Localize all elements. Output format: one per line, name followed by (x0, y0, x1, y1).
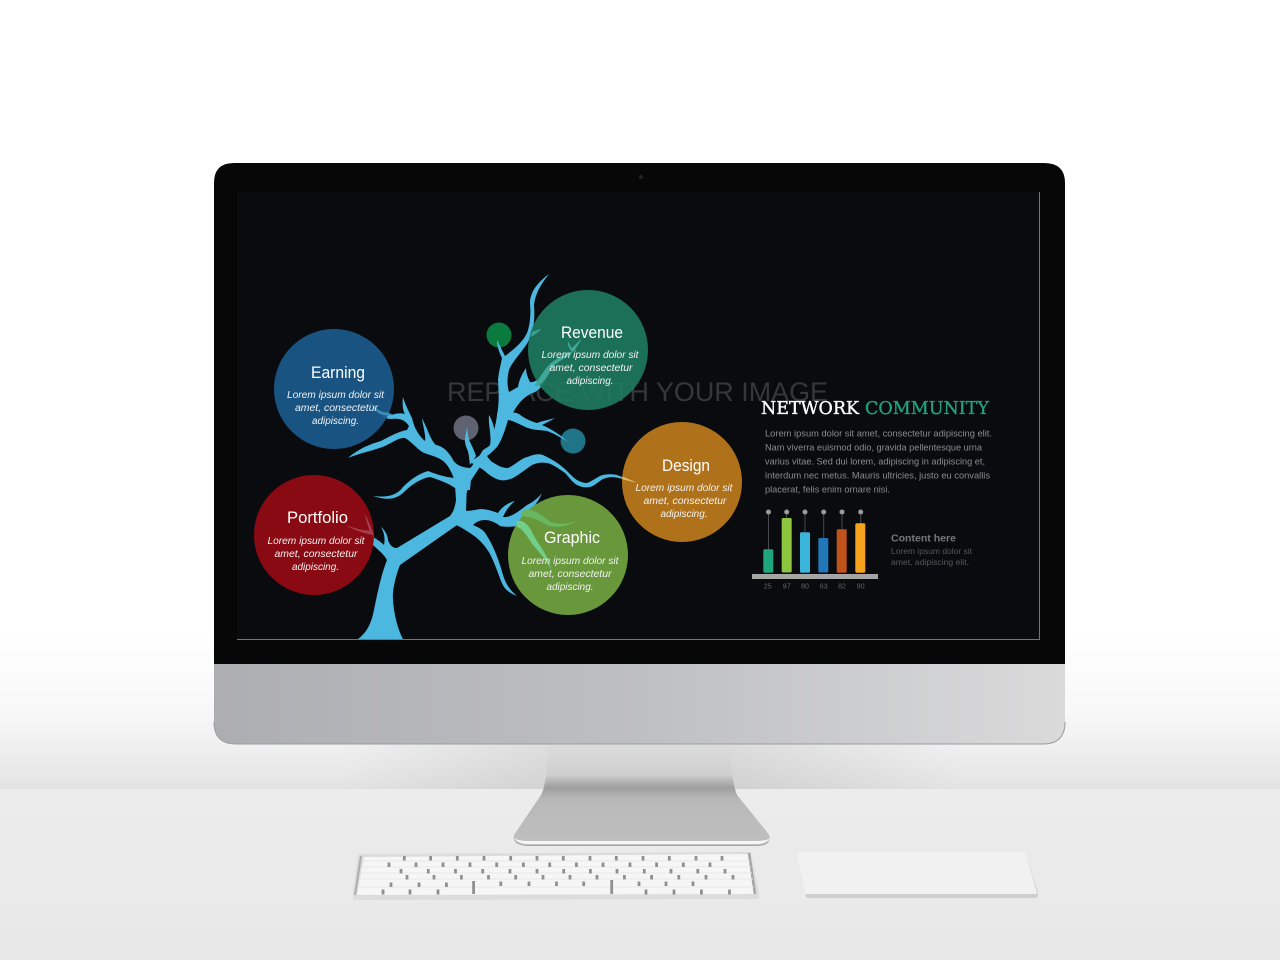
text block: description: placerat, felis enim ornare nisi. (765, 484, 890, 496)
bar chart: 80 (801, 584, 809, 590)
keyboard (353, 852, 759, 900)
callout: content here: Lorem ipsum dolor sit (891, 546, 973, 556)
desk surface (0, 789, 1280, 960)
label: Design: Lorem ipsum dolor sit (636, 482, 734, 494)
label: Revenue: Revenue (561, 324, 623, 342)
label: Graphic: Lorem ipsum dolor sit (522, 555, 620, 567)
tree (348, 274, 632, 639)
monitor stand (514, 744, 770, 846)
callout: content here: amet, adipiscing elit. (891, 557, 969, 567)
label: Revenue: Lorem ipsum dolor sit (542, 349, 640, 361)
bar chart: 90 (857, 584, 865, 590)
label: Design: Design (662, 457, 710, 475)
tree branches seen through circles (345, 329, 637, 572)
label: Design (636, 457, 734, 520)
text block: description: Nam viverra euismod odio, gravida pellentesque urna (765, 442, 983, 454)
label: Earning: Lorem ipsum dolor sit (287, 389, 385, 401)
label: Earning: adipiscing. (312, 415, 359, 427)
label: Revenue (542, 324, 640, 387)
label: Earning: Earning (311, 364, 365, 382)
label: Earning (287, 364, 385, 427)
label: Portfolio (268, 509, 366, 573)
circle: Revenue (528, 290, 648, 410)
bar chart: 82 (838, 584, 846, 590)
text block: description (765, 428, 992, 496)
monitor bezel (214, 163, 1065, 664)
monitor (214, 163, 1065, 846)
bar chart: 25 (764, 584, 772, 590)
label: Portfolio: Lorem ipsum dolor sit (268, 535, 366, 547)
circle: Portfolio (254, 475, 374, 595)
label: Graphic (522, 529, 620, 593)
icon: small teal node (560, 428, 586, 454)
circle: Graphic (508, 495, 628, 615)
label: Revenue: adipiscing. (566, 375, 614, 387)
label: Revenue: amet, consectetur (550, 362, 633, 374)
text block: description: interdum nec metus. Mauris ultricies, justo eu convallis (765, 470, 990, 482)
monitor chin (214, 664, 1065, 744)
icon: small green node (486, 322, 512, 348)
wall shadow (340, 744, 960, 789)
label: Portfolio: adipiscing. (292, 561, 339, 573)
label: Earning: amet, consectetur (295, 402, 378, 414)
watermark: REPLACE WITH YOUR IMAGE (447, 377, 828, 407)
label: Design: amet, consectetur (644, 495, 727, 507)
callout: content here: Content here (891, 532, 956, 544)
heading: Network Community (761, 398, 990, 419)
label: Graphic: Graphic (544, 529, 600, 547)
text block: description: varius vitae. Sed dui lorem, adipiscing in adipiscing et, (765, 456, 985, 468)
camera (639, 175, 643, 179)
bar chart (752, 510, 878, 590)
icon: small grey node (454, 416, 478, 440)
bar chart: 63 (820, 584, 828, 590)
heading: Network Community: NETWORK (761, 398, 860, 419)
bar chart: 97 (783, 584, 791, 590)
label: Portfolio: amet, consectetur (274, 548, 358, 560)
circle: Earning (274, 329, 394, 449)
screen (237, 192, 1039, 639)
callout: content here (891, 532, 973, 567)
circle: Design (622, 422, 742, 542)
label: Design: adipiscing. (660, 508, 708, 520)
trackpad (797, 852, 1038, 898)
label: Graphic: amet, consectetur (528, 568, 612, 580)
label: Portfolio: Portfolio (287, 509, 348, 527)
heading: Network Community: COMMUNITY (865, 398, 990, 419)
label: Graphic: adipiscing. (546, 581, 594, 593)
text block: description: Lorem ipsum dolor sit amet, consectetur adipiscing elit. (765, 428, 992, 440)
